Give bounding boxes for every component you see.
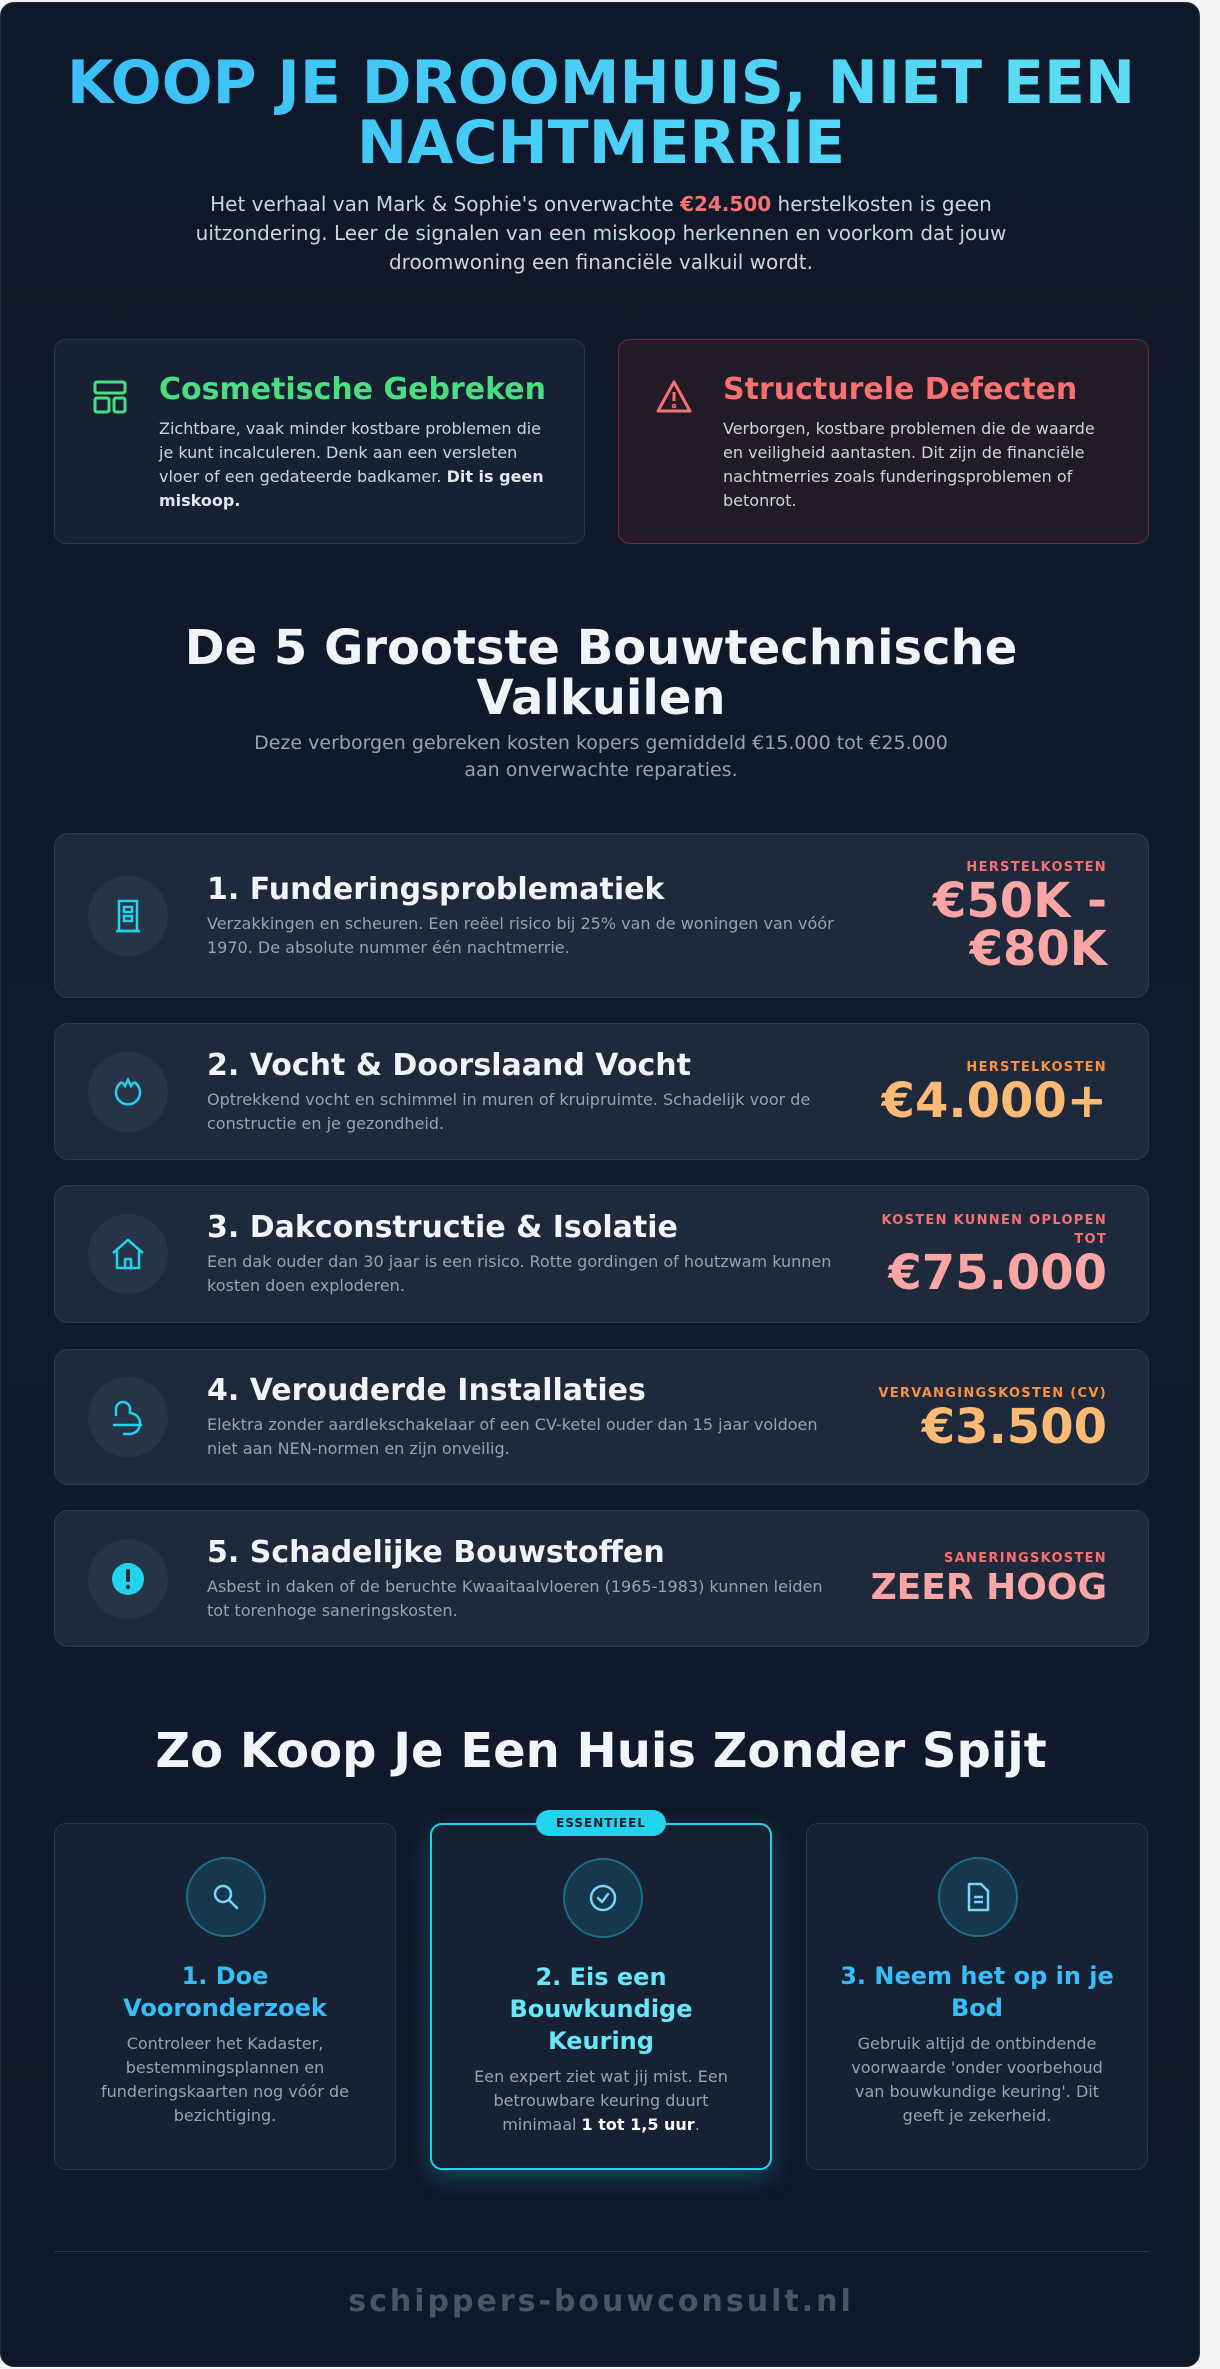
- title: KOOP JE DROOMHUIS, NIET EEN: [67, 48, 1135, 118]
- text: Een dak ouder dan 30 jaar is een risico. Rotte gordingen of houtzwam kunnen kosten doen exploderen.: [207, 1252, 831, 1295]
- cost: [881, 1213, 1107, 1301]
- panel: issue 5: [54, 1510, 1149, 1647]
- text: 4. Verouderde Installaties: [207, 1373, 646, 1408]
- text: Verborgen, kostbare problemen die de waarde en veiligheid aantasten. Dit zijn de financiële nachtmerries zoals funderingsproblemen of betonrot.: [723, 419, 1095, 510]
- icon: check: [563, 1858, 643, 1938]
- heading: 5 pitfalls: De 5 Grootste Bouwtechnische: [185, 620, 1017, 676]
- cost: [932, 860, 1108, 977]
- icon: search: [186, 1857, 266, 1937]
- text: [207, 872, 834, 956]
- text: 3. Dakconstructie & Isolatie: [207, 1210, 678, 1245]
- step title: 2. Eis een Bouwkundige Keuring: [509, 1963, 693, 2055]
- badge: ESSENTIEEL: [556, 1816, 646, 1830]
- panel: issue 4: [54, 1349, 1149, 1485]
- text: 2. Vocht & Doorslaand Vocht: [207, 1048, 691, 1082]
- icon: house: [88, 1214, 168, 1294]
- cost: SANERINGSKOSTEN: [944, 1551, 1107, 1566]
- cost: [878, 1386, 1107, 1454]
- cost: VERVANGINGSKOSTEN (CV): [878, 1386, 1107, 1400]
- text: [207, 1534, 823, 1620]
- heading: Cosmetische Gebreken: [159, 372, 546, 407]
- panel: step 2: [430, 1823, 772, 2170]
- text: [207, 1048, 810, 1132]
- panel: cosmetic defects: [54, 339, 585, 544]
- heading: Structurele Defecten: [723, 372, 1077, 407]
- heading: 5 pitfalls: Valkuilen: [476, 670, 726, 726]
- subtitle: Het verhaal van Mark & Sophie's onverwachte €24.500 herstelkosten is geen uitzondering. Leer de signalen van een miskoop herkennen en voorkom dat jouw droomwoning een financiële valkuil wordt.: [196, 192, 1006, 274]
- icon: installation: [88, 1377, 168, 1457]
- footer: schippers-bouwconsult.nl: [348, 2284, 854, 2319]
- panel: issue 2: [54, 1023, 1149, 1160]
- cost: ZEER HOOG: [871, 1567, 1107, 1608]
- cost: €3.500: [922, 1398, 1107, 1454]
- step text: Een expert ziet wat jij mist. Een betrouwbare keuring duurt minimaal 1 tot 1,5 uur.: [474, 2067, 728, 2134]
- step title: 1. Doe Vooronderzoek: [123, 1962, 327, 2022]
- cost: KOSTEN KUNNEN OPLOPEN TOT: [881, 1213, 1107, 1247]
- heading: 5 pitfalls: [185, 620, 1017, 726]
- heading: how to buy: Zo Koop Je Een Huis Zonder Spijt: [155, 1723, 1047, 1779]
- step title: 3. Neem het op in je Bod: [840, 1962, 1114, 2022]
- step text: Controleer het Kadaster, bestemmingsplannen en funderingskaarten nog vóór de bezichtiging.: [101, 2034, 349, 2125]
- text: Optrekkend vocht en schimmel in muren of kruipruimte. Schadelijk voor de constructie en je gezondheid.: [207, 1090, 810, 1132]
- cost: €75.000: [888, 1245, 1107, 1301]
- step text: Gebruik altijd de ontbindende voorwaarde 'onder voorbehoud van bouwkundige keuring'. Dit geeft je zekerheid.: [851, 2034, 1103, 2125]
- icon: moisture: [88, 1052, 168, 1132]
- panel: issue 1: [54, 833, 1149, 998]
- title: NACHTMERRIE: [357, 108, 845, 178]
- subheading: Deze verborgen gebreken kosten kopers gemiddeld €15.000 tot €25.000 aan onverwachte reparaties.: [254, 732, 948, 781]
- panel: issue 3: [54, 1185, 1149, 1323]
- panel: step 1: [54, 1823, 396, 2170]
- icon: layout: [94, 380, 126, 414]
- text: [207, 1373, 818, 1458]
- icon: warning: [656, 380, 692, 412]
- text: Verzakkingen en scheuren. Een reëel risico bij 25% van de woningen van vóór 1970. De absolute nummer één nachtmerrie.: [207, 914, 834, 956]
- panel: structural defects: [618, 339, 1149, 544]
- cost: HERSTELKOSTEN: [966, 1060, 1107, 1075]
- text: 5. Schadelijke Bouwstoffen: [207, 1534, 665, 1570]
- icon: foundation: [88, 876, 168, 956]
- text: Asbest in daken of de beruchte Kwaaitaalvloeren (1965-1983) kunnen leiden tot torenhoge saneringskosten.: [207, 1576, 823, 1620]
- text: Zichtbare, vaak minder kostbare problemen die je kunt incalculeren. Denk aan een versleten vloer of een gedateerde badkamer. Dit is geen miskoop.: [159, 419, 544, 510]
- text: Elektra zonder aardlekschakelaar of een CV-ketel ouder dan 15 jaar voldoen niet aan NEN-normen en zijn onveilig.: [207, 1415, 818, 1458]
- cost: €4.000+: [882, 1073, 1107, 1129]
- panel: step 3: [806, 1823, 1148, 2170]
- text: [207, 1210, 831, 1295]
- cost: €50K -: [933, 873, 1107, 929]
- badge: [536, 1810, 666, 1836]
- title: [1, 53, 1201, 173]
- cost: €80K: [970, 921, 1107, 977]
- cost: HERSTELKOSTEN: [966, 860, 1107, 875]
- text: 1. Funderingsproblematiek: [207, 872, 664, 906]
- icon: alert: [88, 1538, 168, 1618]
- icon: document: [938, 1857, 1018, 1937]
